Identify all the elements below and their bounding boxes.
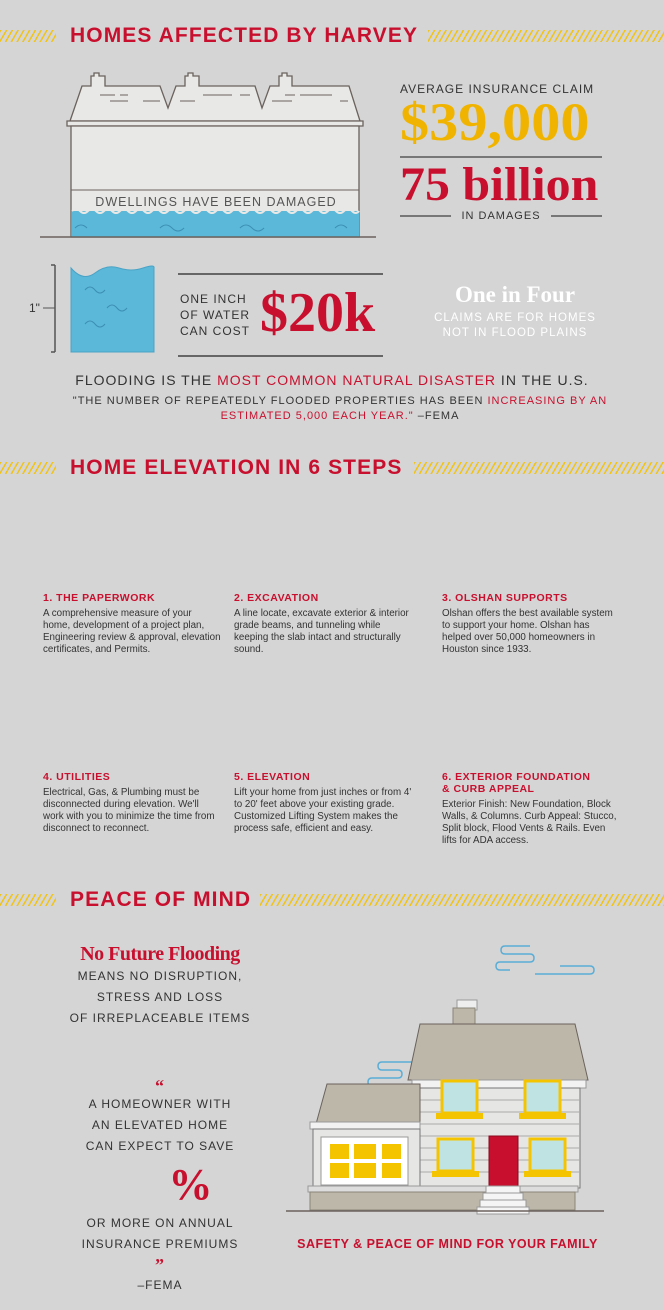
text: no future flooding: MEANS NO DISRUPTION, (78, 969, 242, 983)
text: no future flooding (70, 943, 250, 1025)
text: no future flooding: No Future Flooding (80, 943, 240, 965)
step 2: 2. EXCAVATION (234, 592, 319, 604)
stat: average claim (400, 82, 602, 222)
header stripes 3 (0, 894, 664, 906)
quote: save percent: A HOMEOWNER WITH (89, 1097, 231, 1111)
illustration: elevated house (286, 945, 604, 1214)
stat: one in four: NOT IN FLOOD PLAINS (443, 327, 587, 339)
step 6 (442, 771, 616, 846)
title: peace of mind: PEACE OF MIND (70, 888, 251, 911)
step 3: 3. OLSHAN SUPPORTS (442, 592, 568, 604)
stat: average claim: 75 billion (400, 158, 598, 211)
quote: save percent: CAN EXPECT TO SAVE OR MORE ON ANNUAL (86, 1139, 234, 1230)
stat: average claim: AVERAGE INSURANCE CLAIM (400, 82, 594, 96)
header stripes 1 (0, 30, 664, 42)
stat: one in four: CLAIMS ARE FOR HOMES (434, 312, 596, 324)
icon: one inch water (29, 264, 155, 353)
stat: $20k: ONE INCH (180, 292, 247, 306)
illustration: damaged dwellings: DWELLINGS HAVE BEEN DAMAGED (95, 195, 337, 209)
quote: save percent: INSURANCE PREMIUMS –FEMA (82, 1237, 238, 1292)
stat: $20k: $20k (260, 282, 375, 344)
step 6: & CURB APPEAL (442, 783, 534, 795)
step 4: Electrical, Gas, & Plumbing must be disconnected during elevation. We'll work with you to minimize the time from disconnect to reconnect. (43, 787, 214, 834)
stat: $20k (178, 273, 383, 357)
step 5: 5. ELEVATION (234, 771, 310, 783)
step 2: A line locate, excavate exterior & interior grade beams, and tunneling while keeping the slab intact and structurally sound. (234, 608, 409, 655)
text: flooding most common: FLOODING IS THE MOST COMMON NATURAL DISASTER IN THE U.S. (75, 372, 589, 388)
step 6: 6. EXTERIOR FOUNDATION (442, 771, 590, 783)
illustration: damaged dwellings (40, 72, 376, 238)
stat: one in four (434, 282, 596, 339)
step 1: 1. THE PAPERWORK (43, 592, 155, 604)
quote: save percent: % (168, 1160, 214, 1209)
title: homes affected: HOMES AFFECTED BY HARVEY (70, 24, 418, 47)
step 6: Exterior Finish: New Foundation, Block Walls, & Columns. Curb Appeal: Stucco, Split block, Flood Vents & Rails. Even lifts for ADA access. (442, 799, 616, 846)
stat: one in four: One in Four (455, 282, 575, 307)
step 3: Olshan offers the best available system to support your home. Olshan has helped over 50,000 homeowners in Houston since 1933. (442, 608, 613, 655)
stat: average claim: IN DAMAGES (461, 210, 541, 222)
stat: average claim: $39,000 (400, 92, 590, 152)
title: six steps: HOME ELEVATION IN 6 STEPS (70, 456, 402, 479)
text: no future flooding: OF IRREPLACEABLE ITEMS (70, 1011, 250, 1025)
quote: save percent: AN ELEVATED HOME (92, 1118, 228, 1132)
caption: safety: SAFETY & PEACE OF MIND FOR YOUR FAMILY (297, 1237, 598, 1251)
text: no future flooding: STRESS AND LOSS (97, 990, 223, 1004)
quote: save percent (82, 1076, 238, 1292)
quote: fema: "THE NUMBER OF REPEATEDLY FLOODED PROPERTIES HAS BEEN INCREASING BY AN ESTIMATED 5,000 EACH YEAR." –FEMA (73, 395, 607, 422)
header stripes 2 (0, 462, 664, 474)
step 5: Lift your home from just inches or from 4' to 20' feet above your existing grade. Customized Lifting System makes the process safe, efficient and easy. (234, 787, 411, 834)
stat: $20k: CAN COST (180, 324, 250, 338)
step 1: A comprehensive measure of your home, development of a project plan, Engineering review & approval, elevation certificates, and Permits. (43, 608, 221, 655)
step 4: 4. UTILITIES (43, 771, 110, 783)
stat: $20k: OF WATER (180, 308, 250, 322)
text: “ (155, 1076, 165, 1096)
quote: save percent: ” (155, 1255, 165, 1275)
icon: one inch water: 1" (29, 301, 40, 315)
